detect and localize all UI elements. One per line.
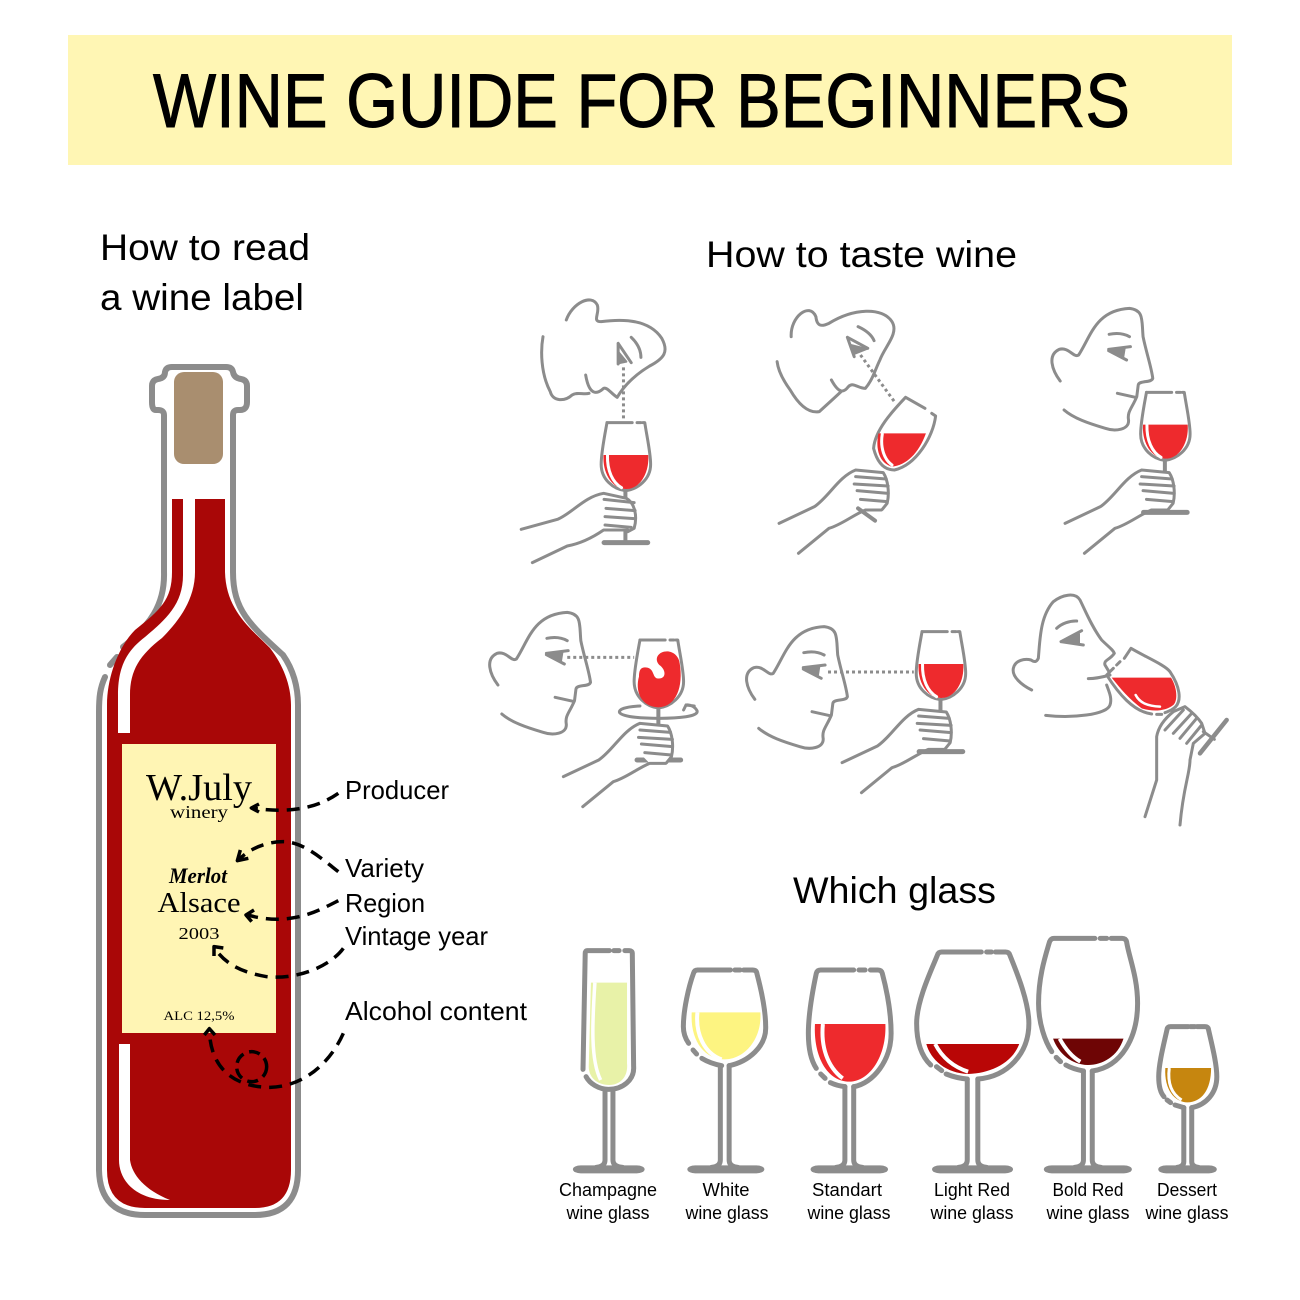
wine label: Alsace: [158, 888, 240, 919]
label callouts: Alcohol content: [345, 996, 528, 1026]
glass: bold red: [1039, 938, 1138, 1173]
label callouts: Region: [345, 888, 425, 918]
wine label: Merlot: [168, 863, 228, 888]
label callouts: Producer: [345, 775, 449, 805]
label: white: [685, 1180, 768, 1223]
title banner: [68, 35, 1232, 165]
label: dessert: wine glass: [1145, 1203, 1228, 1223]
label: light red: Light Red: [934, 1180, 1010, 1200]
label: white: White: [702, 1180, 750, 1200]
wine label: W.July: [146, 767, 252, 809]
label: bold red: wine glass: [1046, 1203, 1130, 1223]
step 6: sip wine: [1013, 595, 1227, 825]
label callouts: Variety: [345, 853, 424, 883]
label: bold red: Bold Red: [1052, 1180, 1124, 1200]
wine label: ALC 12,5%: [164, 1008, 235, 1023]
panel: wine bottle: [99, 367, 298, 1215]
step 5: inspect colour: [747, 627, 966, 793]
wine fill: [107, 499, 291, 1208]
step 4: swirl wine: [490, 612, 697, 807]
label: dessert: [1145, 1180, 1228, 1223]
wine label: [122, 744, 276, 1033]
step 3: smell wine: [1052, 308, 1190, 553]
lower bottle highlight: [119, 1044, 170, 1200]
heading: how to read a wine label: a wine label: [100, 277, 304, 318]
label: champagne: wine glass: [566, 1203, 650, 1223]
glass: standart: [808, 970, 891, 1173]
glass: light red: [917, 952, 1029, 1173]
glass: white: [683, 970, 766, 1173]
label: standart: [807, 1180, 890, 1223]
label: white: wine glass: [685, 1203, 768, 1223]
label: standart: Standart: [812, 1180, 882, 1200]
label: light red: wine glass: [930, 1203, 1014, 1223]
title: WINE GUIDE FOR BEGINNERS: [153, 59, 1130, 144]
glass: dessert: [1158, 1027, 1217, 1173]
wine label: winery: [170, 802, 228, 822]
step 2: tilt glass: [777, 311, 936, 553]
dashed arrows: [204, 793, 343, 1087]
bottle highlight: [118, 499, 195, 733]
label callouts: [345, 775, 528, 1026]
step 1: look down at glass: [521, 300, 665, 563]
bottle outline: [99, 367, 298, 1215]
heading: how to read a wine label: How to read: [100, 227, 310, 268]
label: champagne: [559, 1180, 657, 1223]
label callouts: Vintage year: [345, 921, 488, 951]
heading: how to read a wine label: [100, 227, 310, 318]
glass: champagne: [573, 951, 645, 1173]
cork: [174, 372, 223, 464]
heading: which glass: Which glass: [793, 870, 996, 911]
label: standart: wine glass: [807, 1203, 890, 1223]
label: champagne: Champagne: [559, 1180, 657, 1200]
label: dessert: Dessert: [1157, 1180, 1217, 1200]
wine label: 2003: [178, 924, 220, 943]
heading: how to taste wine: How to taste wine: [706, 234, 1017, 275]
label: bold red: [1046, 1180, 1130, 1223]
label: light red: [930, 1180, 1014, 1223]
